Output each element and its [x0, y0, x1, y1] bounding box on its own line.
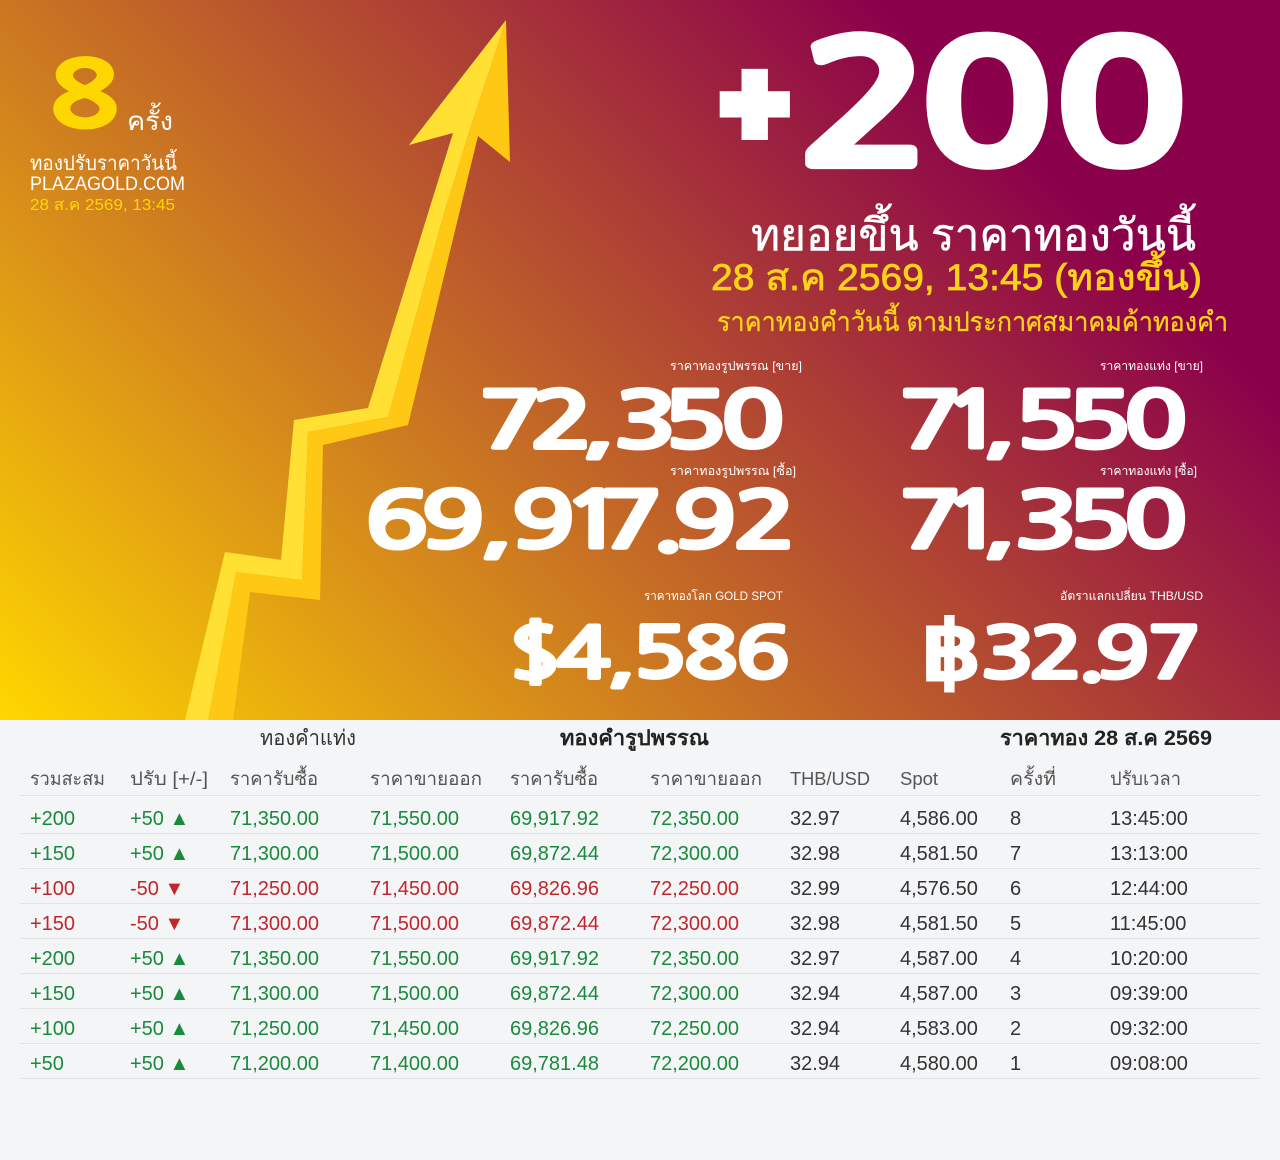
table row 1: 71,350.00: [230, 808, 319, 830]
table column headers: Spot: [900, 768, 938, 789]
table row 6: 3: [1010, 983, 1021, 1005]
table row 2: +50 ▲: [130, 843, 189, 865]
price: gold spot: ราคาทองโลก GOLD SPOT: [644, 589, 784, 603]
table row 5: 32.97: [790, 948, 840, 970]
table row 5: 4: [1010, 948, 1021, 970]
table row 4: 71,300.00: [230, 913, 319, 935]
table row 4: 32.98: [790, 913, 840, 935]
price: ornament gold buy: 69,917.92: [364, 483, 798, 560]
table row 8: 71,400.00: [370, 1053, 459, 1075]
table row 8: 09:08:00: [1110, 1053, 1188, 1075]
table row 4: 71,500.00: [370, 913, 459, 935]
table row 8: +50 ▲: [130, 1053, 189, 1075]
table row 8: 71,200.00: [230, 1053, 319, 1075]
headline text: ราคาทองคำวันนี้ ตามประกาศสมาคมค้าทองคำ: [717, 302, 1228, 337]
table column headers: ราคารับซื้อ: [230, 765, 318, 789]
table group titles: ทองคำแท่ง: [260, 727, 356, 750]
table row 7: 09:32:00: [1110, 1018, 1188, 1040]
table row 2: 69,872.44: [510, 843, 599, 865]
table row 3: 71,450.00: [370, 878, 459, 900]
price: ornament gold sell: 72,350: [478, 383, 786, 460]
table row 1: 32.97: [790, 808, 840, 830]
table column headers: ราคาขายออก: [650, 768, 762, 789]
table row 4: 5: [1010, 913, 1021, 935]
table row 8: 72,200.00: [650, 1053, 739, 1075]
table row 7: 71,250.00: [230, 1018, 319, 1040]
headline change amount: +: [722, 41, 787, 166]
table row 8: [30, 1053, 1188, 1075]
table row 3: 71,250.00: [230, 878, 319, 900]
table row 7: 2: [1010, 1018, 1021, 1040]
table row 7: 69,826.96: [510, 1018, 599, 1040]
price: gold spot: $4,586: [507, 618, 790, 689]
price: gold bar buy: 71,350: [898, 483, 1189, 560]
count badge: ทองปรับราคาวันนี้: [30, 149, 177, 175]
table row 3: 69,826.96: [510, 878, 599, 900]
table row 5: 72,350.00: [650, 948, 739, 970]
table row 2: 71,500.00: [370, 843, 459, 865]
price: ornament gold sell: ราคาทองรูปพรรณ [ขาย]: [670, 359, 802, 374]
table row 7: 32.94: [790, 1018, 840, 1040]
count badge: 28 ส.ค 2569, 13:45: [30, 197, 175, 214]
headline change amount: 200: [797, 22, 1189, 191]
table row 5: +200: [30, 948, 75, 970]
table row 1: [30, 808, 1188, 830]
table row 5: 71,350.00: [230, 948, 319, 970]
table row 4: 4,581.50: [900, 913, 978, 935]
table row 5: 4,587.00: [900, 948, 978, 970]
table row 5: [30, 948, 1188, 970]
table row 1: +200: [30, 808, 75, 830]
table group titles: ทองคำรูปพรรณ: [560, 727, 710, 752]
table column headers: ครั้งที่: [1010, 765, 1056, 789]
table row 6: 32.94: [790, 983, 840, 1005]
price: gold bar sell: ราคาทองแท่ง [ขาย]: [1100, 359, 1203, 373]
table row 5: 10:20:00: [1110, 948, 1188, 970]
count badge: PLAZAGOLD.COM: [30, 174, 185, 195]
table row 3: 4,576.50: [900, 878, 978, 900]
table row 1: 69,917.92: [510, 808, 599, 830]
table row 3: +100: [30, 878, 75, 900]
table column headers: THB/USD: [790, 768, 870, 789]
icon: rising arrow: [185, 20, 510, 720]
table row 7: +100: [30, 1018, 75, 1040]
table column headers: ปรับ [+/-]: [130, 768, 208, 789]
table row 3: 12:44:00: [1110, 878, 1188, 900]
price: gold bar buy: ราคาทองแท่ง [ซื้อ]: [1100, 462, 1197, 478]
table row 3: [30, 878, 1188, 900]
table row 2: 4,581.50: [900, 843, 978, 865]
table row 4: -50 ▼: [130, 913, 184, 935]
table row 4: [30, 913, 1186, 935]
count badge: ครั้ง: [127, 102, 173, 136]
count badge: [30, 51, 185, 214]
table row 4: +150: [30, 913, 75, 935]
price: exchange rate: ฿: [921, 607, 981, 696]
table group titles: ราคาทอง 28 ส.ค 2569: [1000, 727, 1212, 750]
table row 6: 72,300.00: [650, 983, 739, 1005]
headline text: 28 ส.ค 2569, 13:45 (ทองขึ้น): [711, 250, 1202, 298]
table row 7: 71,450.00: [370, 1018, 459, 1040]
table row 8: +50: [30, 1053, 64, 1075]
price: gold bar sell: 71,550: [898, 383, 1189, 460]
table row 6: 71,500.00: [370, 983, 459, 1005]
table row 4: 11:45:00: [1110, 913, 1186, 935]
table row 1: 8: [1010, 808, 1021, 830]
table panel: [0, 720, 1280, 1160]
table column headers: รวมสะสม: [30, 768, 105, 789]
table row 6: 09:39:00: [1110, 983, 1188, 1005]
price: exchange rate: อัตราแลกเปลี่ยน THB/USD: [1060, 587, 1203, 603]
headline text: [711, 203, 1228, 337]
count badge: 8: [49, 51, 120, 141]
table row 3: 6: [1010, 878, 1021, 900]
table row 1: 13:45:00: [1110, 808, 1188, 830]
table row 4: 72,300.00: [650, 913, 739, 935]
table row 6: [30, 983, 1188, 1005]
table row 8: 1: [1010, 1053, 1021, 1075]
table row 1: 71,550.00: [370, 808, 459, 830]
table row 5: 69,917.92: [510, 948, 599, 970]
table row 6: +150: [30, 983, 75, 1005]
table row 6: 69,872.44: [510, 983, 599, 1005]
table row 8: 4,580.00: [900, 1053, 978, 1075]
table row 3: 32.99: [790, 878, 840, 900]
table row 7: [30, 1018, 1188, 1040]
table group titles: [260, 727, 1212, 752]
table row 2: +150: [30, 843, 75, 865]
table row 5: 71,550.00: [370, 948, 459, 970]
table row 6: +50 ▲: [130, 983, 189, 1005]
table row 7: +50 ▲: [130, 1018, 189, 1040]
table column headers: [30, 765, 1181, 789]
table row 6: 71,300.00: [230, 983, 319, 1005]
table column headers: ปรับเวลา: [1110, 768, 1181, 789]
table row 5: +50 ▲: [130, 948, 189, 970]
table row 4: 69,872.44: [510, 913, 599, 935]
table row 2: 71,300.00: [230, 843, 319, 865]
table row 8: 32.94: [790, 1053, 840, 1075]
table row 1: +50 ▲: [130, 808, 189, 830]
hero background: [0, 0, 1280, 720]
table row 3: -50 ▼: [130, 878, 184, 900]
price: exchange rate: 32.97: [980, 619, 1202, 689]
table row 2: [30, 843, 1188, 865]
table row 7: 72,250.00: [650, 1018, 739, 1040]
table row 7: 4,583.00: [900, 1018, 978, 1040]
table row 2: 13:13:00: [1110, 843, 1188, 865]
table row 3: 72,250.00: [650, 878, 739, 900]
table row 2: 7: [1010, 843, 1021, 865]
table row 2: 72,300.00: [650, 843, 739, 865]
price: exchange rate: [921, 587, 1203, 696]
price: ornament gold buy: ราคาทองรูปพรรณ [ซื้อ]: [670, 462, 796, 479]
table row 8: 69,781.48: [510, 1053, 599, 1075]
headline text: ทยอยขึ้น ราคาทองวันนี้: [751, 203, 1196, 260]
table row 1: 4,586.00: [900, 808, 978, 830]
table row 1: 72,350.00: [650, 808, 739, 830]
table column headers: ราคาขายออก: [370, 768, 482, 789]
price: gold spot: [507, 589, 790, 689]
table row 6: 4,587.00: [900, 983, 978, 1005]
table row 2: 32.98: [790, 843, 840, 865]
table column headers: ราคารับซื้อ: [510, 765, 598, 789]
